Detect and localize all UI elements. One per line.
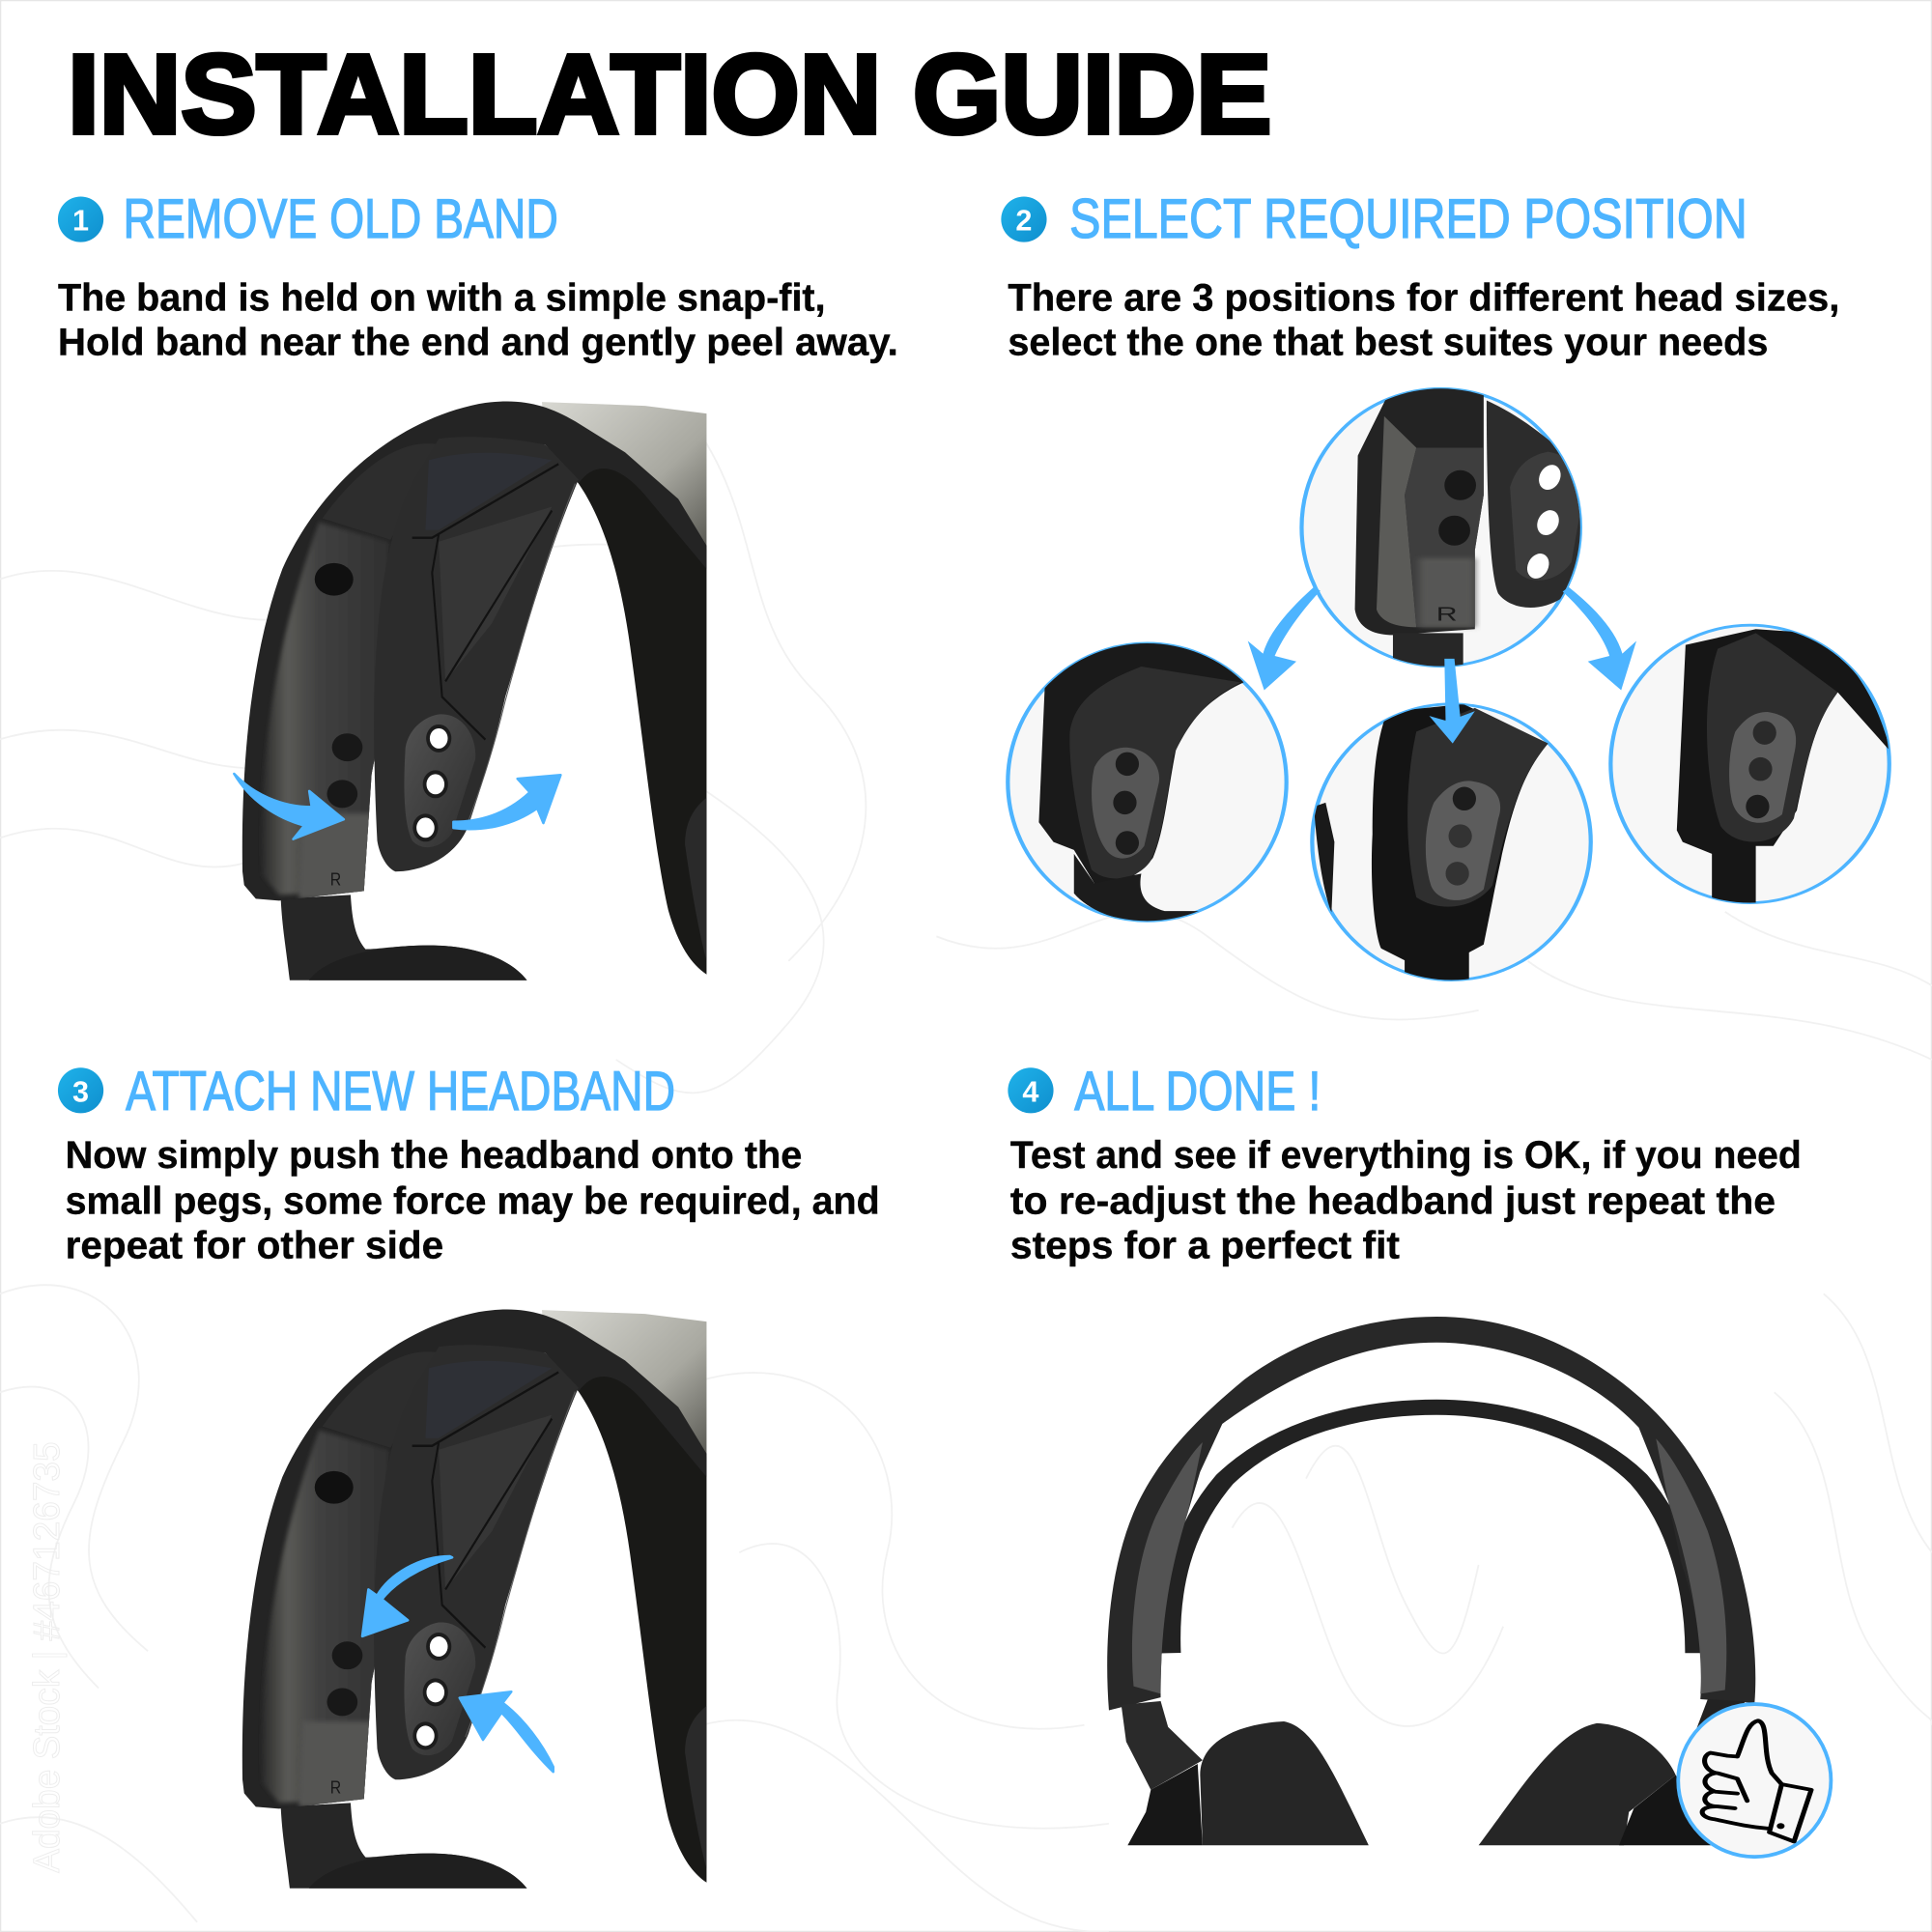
callout: thumbs up circle — [1678, 1704, 1831, 1857]
step 1 instructions: Hold band near the end and gently peel away. — [58, 321, 898, 363]
arrow: to position 1 — [1248, 587, 1321, 691]
step 1 instructions: The band is held on with a simple snap-fit, — [58, 276, 826, 319]
step 3 number badge: 3 — [72, 1075, 89, 1108]
arrow: peel band from shell — [234, 774, 344, 839]
step 4 instructions: steps for a perfect fit — [1010, 1224, 1400, 1266]
step 3 instructions: Now simply push the headband onto the — [66, 1134, 802, 1177]
watermark text: Adobe Stock | #467126735 — [26, 1441, 68, 1873]
step 2 number badge — [1001, 196, 1047, 242]
step 2 instructions: There are 3 positions for different head sizes, — [1008, 276, 1839, 319]
background contour pattern — [0, 419, 1932, 1932]
step 2 panel: select required position — [1001, 188, 1890, 980]
photo: headphone band with pad lifted — [242, 401, 706, 980]
step 2 number badge: 2 — [1015, 205, 1032, 238]
arrow: peel band away — [453, 775, 560, 829]
step 3 instructions: repeat for other side — [66, 1224, 443, 1266]
photo: headphone band with pad lifted: R — [330, 868, 341, 890]
circle: position 2 — [1312, 704, 1591, 980]
title: INSTALLATION GUIDE — [68, 32, 1271, 157]
circle: detached band and pegs: R — [1436, 604, 1458, 625]
step 3 instructions: small pegs, some force may be required, and — [66, 1179, 880, 1222]
step 1 number badge — [58, 196, 103, 242]
step 3 heading: ATTACH NEW HEADBAND — [126, 1061, 675, 1122]
step 4 instructions: Test and see if everything is OK, if you need — [1010, 1134, 1802, 1177]
step 1 panel: remove old band — [58, 188, 898, 980]
step 3 instructions — [66, 1134, 880, 1266]
circle: position 3 — [1610, 625, 1890, 905]
icon: thumbs up hand — [1702, 1720, 1811, 1841]
step 1 heading: REMOVE OLD BAND — [124, 188, 558, 250]
position diagram: four circular close-ups with arrows — [1008, 384, 1890, 980]
arrow: lower push onto peg — [460, 1691, 554, 1772]
arrow: upper push onto peg — [362, 1556, 452, 1636]
step 1 instructions — [58, 276, 898, 363]
step 2 heading: SELECT REQUIRED POSITION — [1069, 188, 1747, 250]
arrow: to position 2 — [1430, 659, 1475, 744]
step 4 number badge — [1008, 1067, 1054, 1113]
step 4 heading: ALL DONE ! — [1074, 1061, 1321, 1122]
step 4 instructions — [1010, 1134, 1802, 1266]
step 1 number badge: 1 — [72, 205, 89, 238]
step 2 instructions — [1008, 276, 1839, 363]
step 3 number badge — [58, 1067, 103, 1113]
arrow: to position 3 — [1563, 587, 1636, 691]
circle: position 1 — [1008, 642, 1287, 928]
step 2 instructions: select the one that best suites your needs — [1008, 321, 1768, 363]
step 4 panel: all done — [1008, 1061, 1831, 1857]
step 4 instructions: to re-adjust the headband just repeat the — [1010, 1179, 1776, 1222]
step 4 number badge: 4 — [1022, 1075, 1038, 1108]
circle: detached band and pegs — [1301, 384, 1586, 668]
photo: headphone band with pad near pegs — [242, 1310, 706, 1889]
photo: complete headphones — [1107, 1317, 1755, 1845]
step 3 panel: attach new headband — [58, 1061, 880, 1889]
